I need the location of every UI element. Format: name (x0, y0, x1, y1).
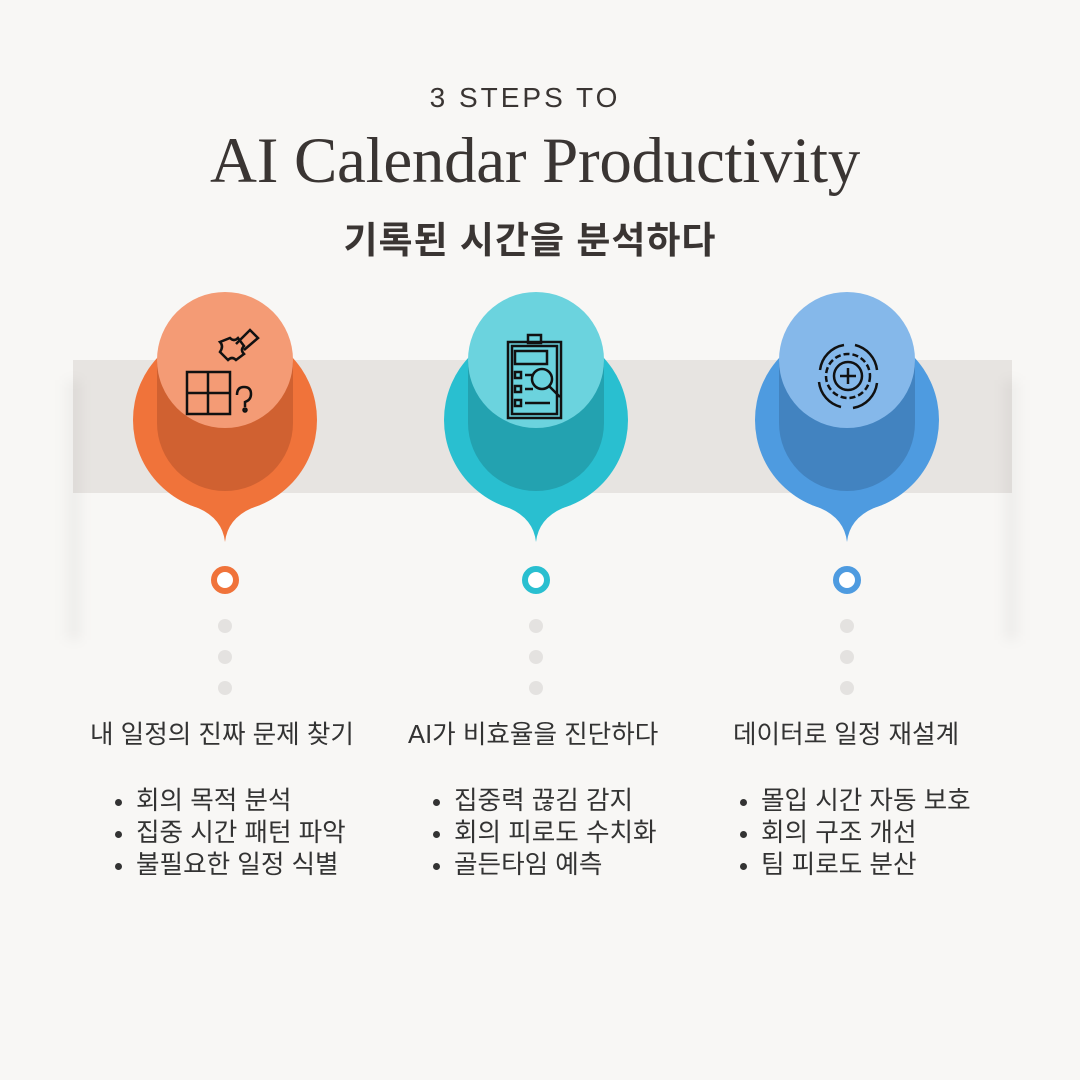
column 3 text: 몰입 시간 자동 보호 (761, 787, 971, 815)
column 1 text: 집중 시간 패턴 파악 (136, 819, 346, 847)
column 1 text: 회의 목적 분석 (136, 787, 292, 815)
column 2 text: 골든타임 예측 (454, 851, 602, 879)
band background (73, 360, 1012, 493)
column 1 text: 불필요한 일정 식별 (136, 851, 339, 879)
column 2 text (408, 721, 658, 879)
column 3 text: 회의 구조 개선 (761, 819, 916, 847)
column 2 text: AI가 비효율을 진단하다 (408, 721, 658, 749)
pin: blue (755, 292, 939, 695)
column 2 text: 집중력 끊김 감지 (454, 787, 633, 815)
icon: gear with arrows (819, 345, 877, 408)
column 3 text: 팀 피로도 분산 (761, 851, 916, 879)
column 3 text: 데이터로 일정 재설계 (733, 721, 959, 749)
column 2 text: 회의 피로도 수치화 (454, 819, 657, 847)
main heading: AI Calendar Productivity (210, 125, 860, 197)
icon: clipboard with magnifier (508, 335, 561, 418)
column 1 text: 내 일정의 진짜 문제 찾기 (90, 721, 354, 749)
band shadows (60, 380, 80, 640)
pin: teal (444, 292, 628, 695)
ring marker (214, 569, 236, 591)
icon: puzzle (187, 330, 258, 414)
column 3 text (733, 721, 971, 879)
column 1 text (90, 721, 354, 879)
pin: orange (133, 292, 317, 695)
subtitle: 기록된 시간을 분석하다 (344, 220, 716, 261)
pins graphic (133, 292, 939, 695)
title: 3 STEPS TO (430, 82, 620, 113)
